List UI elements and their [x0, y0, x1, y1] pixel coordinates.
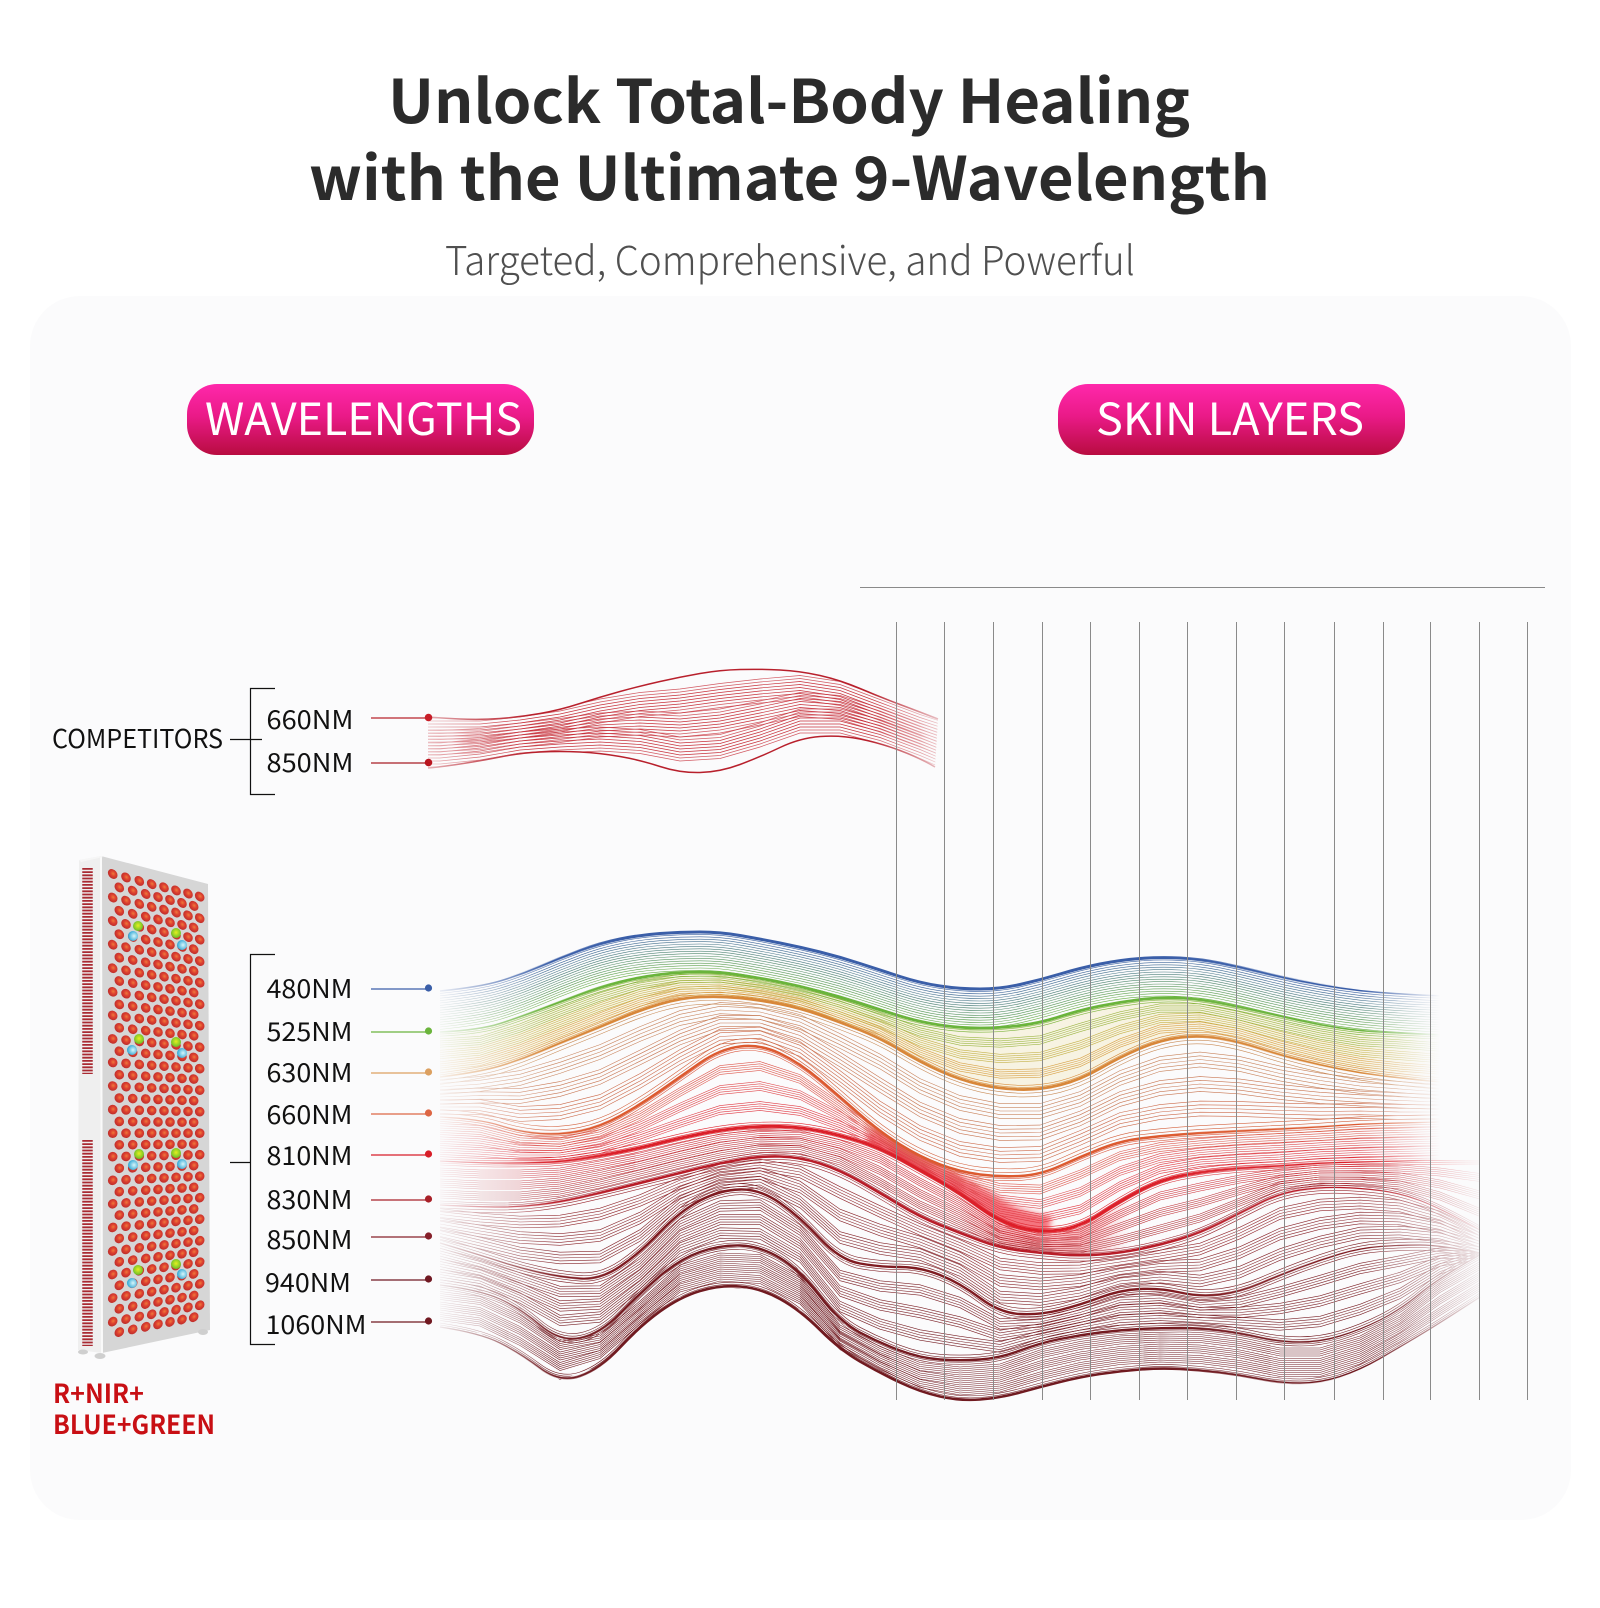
heading pill: skin layers: SKIN LAYERS [1096, 384, 1364, 448]
wavelength: 810nm [266, 1136, 432, 1173]
band: 630nm to 660nm [440, 1000, 1436, 1173]
wave bundle: 480 to 660nm, upper bands [440, 932, 1480, 1235]
curve: 1060nm [440, 1286, 1480, 1400]
product caption: R+NIR+ [53, 1374, 144, 1411]
competitor wavelength: 850nm [266, 743, 432, 780]
wavelength: 525nm: 525NM [266, 1012, 352, 1049]
subtitle: Targeted, Comprehensive, and Powerful [445, 229, 1135, 287]
wavelength: 1060nm [266, 1305, 432, 1342]
title: Unlock Total-Body Healing [388, 54, 1190, 141]
wavelength: 940nm [265, 1263, 432, 1300]
band: 810nm to 830nm [440, 1126, 1479, 1254]
competitor wavelength: 660nm [266, 700, 432, 737]
wavelength: 525nm [266, 1012, 432, 1049]
band: 850nm to 940nm [440, 1184, 1480, 1365]
wavelength: 830nm [266, 1180, 432, 1217]
product: LED therapy panel [78, 856, 210, 1359]
competitor wavelength: 660nm: 660NM [266, 700, 354, 737]
competitors label with bracket [52, 688, 275, 794]
band: 830nm to 850nm [440, 1151, 1480, 1320]
curve: 525nm [440, 972, 1480, 1036]
competitors wave bundle [428, 669, 940, 773]
curve: 810nm [440, 1126, 1480, 1231]
wavelength: 660nm: 660NM [266, 1095, 352, 1132]
curve: 850nm [440, 1189, 1480, 1314]
wavelength: 850nm [266, 1220, 432, 1257]
band: 525nm to 630nm [440, 974, 1436, 1088]
wavelength: 630nm [266, 1053, 432, 1090]
skin layers vertical grid [896, 622, 1528, 1400]
wavelength: 1060nm: 1060NM [266, 1305, 366, 1342]
band: 480nm to 525nm [440, 934, 1480, 1035]
wavelength: 830nm: 830NM [266, 1180, 352, 1217]
wavelength: 810nm: 810NM [266, 1136, 352, 1173]
wavelength: 660nm [266, 1095, 432, 1132]
title [309, 54, 1270, 218]
curve: 630nm [440, 997, 1480, 1090]
curve: 940nm [440, 1245, 1480, 1360]
competitors label with bracket: COMPETITORS [52, 719, 223, 756]
product caption: BLUE+GREEN [53, 1405, 215, 1442]
skin layers horizontal rule [860, 586, 1545, 588]
wavelength: 850nm: 850NM [266, 1220, 352, 1257]
band: 940nm to 1060nm [440, 1241, 1480, 1404]
wavelength: 630nm: 630NM [266, 1053, 352, 1090]
band: 660nm to 810nm [440, 1042, 1480, 1235]
wavelength: 480nm [266, 969, 432, 1006]
heading pill: skin layers [1058, 384, 1405, 455]
heading pill: wavelengths: WAVELENGTHS [205, 384, 522, 448]
wavelength bracket [230, 954, 275, 1344]
competitor wavelength: 850nm: 850NM [266, 743, 354, 780]
curve: 480nm [440, 932, 1480, 997]
curve: 830nm [440, 1156, 1480, 1255]
wavelength: 480nm: 480NM [266, 969, 352, 1006]
wavelength: 940nm: 940NM [265, 1263, 351, 1300]
panel: chart background [30, 296, 1571, 1520]
title: with the Ultimate 9-Wavelength [309, 131, 1270, 218]
curve: 660nm [440, 1046, 1480, 1176]
product caption [53, 1374, 215, 1442]
wave bundle: 810 to 1060nm, lower bands [440, 1122, 1480, 1404]
